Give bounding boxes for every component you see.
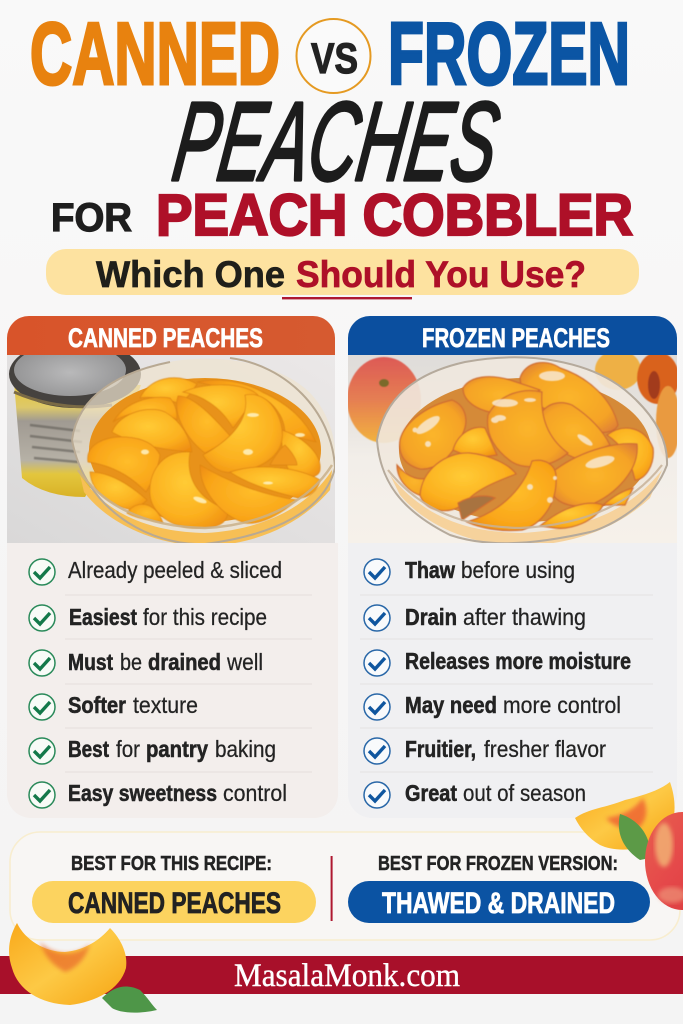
glass bowl — [377, 357, 667, 546]
item: best for pantry: pantry — [146, 736, 208, 762]
item: may need — [364, 692, 621, 720]
footer band: MasalaMonk.com — [234, 958, 460, 994]
photo: canned peaches — [7, 340, 335, 546]
heading: for: FOR — [51, 196, 132, 240]
item: fruitier: Fruitier, — [405, 736, 476, 762]
label: best for frozen version: BEST FOR FROZEN VERSION: — [378, 853, 618, 875]
pill: thawed and drained — [348, 881, 650, 923]
panel: canned list background — [7, 543, 338, 818]
item: sweetness — [29, 780, 287, 808]
photo: frozen peaches — [347, 350, 680, 546]
heading: canned: CANNED — [30, 4, 280, 103]
frost flecks — [412, 371, 616, 503]
item: easiest: for this recipe — [143, 604, 267, 630]
can — [9, 340, 141, 497]
header: canned peaches: CANNED PEACHES — [68, 323, 263, 353]
pill: canned peaches — [32, 881, 316, 923]
item: drain: after thawing — [463, 604, 586, 630]
panel: frozen list background — [348, 543, 677, 818]
title — [30, 4, 633, 248]
item: sweetness: Easy sweetness — [68, 780, 217, 806]
subtitle pill: Should You Use? — [296, 254, 586, 295]
item: fruitier — [364, 736, 606, 764]
item: softer: texture — [133, 692, 198, 718]
peach slice and leaf: top right — [575, 782, 675, 860]
item: best for pantry: for — [116, 736, 140, 762]
highlights — [141, 413, 305, 505]
pill: thawed and drained: THAWED & DRAINED — [382, 887, 615, 920]
item: best for pantry: Best — [68, 736, 109, 762]
item: releases — [364, 648, 631, 676]
pill: canned peaches: CANNED PEACHES — [68, 887, 281, 920]
canned list — [29, 557, 312, 808]
item: great: out of season — [463, 780, 586, 806]
peach slices — [88, 378, 320, 528]
divider — [331, 856, 333, 921]
item: sweetness: control — [223, 780, 287, 806]
badge: vs — [296, 19, 370, 93]
item: must be drained — [29, 649, 263, 676]
item: great: Great — [405, 780, 457, 806]
item: softer: Softer — [68, 692, 126, 718]
subtitle pill: Which One — [96, 254, 285, 295]
header: canned peaches — [7, 316, 335, 355]
item: may need: more control — [503, 692, 621, 718]
peach wedge and leaf: bottom left — [9, 923, 157, 1013]
header: frozen peaches — [348, 316, 677, 355]
heading: peach cobbler: PEACH COBBLER — [156, 183, 633, 248]
footer band — [0, 956, 683, 994]
item: drain: Drain — [405, 604, 457, 630]
panel: verdict — [10, 832, 680, 940]
item: drain — [364, 604, 586, 631]
frozen list — [360, 557, 653, 808]
header: frozen peaches: FROZEN PEACHES — [422, 323, 610, 353]
item: easiest — [29, 604, 267, 631]
item: thaw: before using — [461, 557, 575, 583]
item: best for pantry — [29, 736, 276, 764]
item: thaw — [364, 557, 575, 585]
item: releases: Releases more moisture — [405, 648, 631, 674]
item: already peeled: Already peeled & sliced — [68, 557, 282, 583]
whole peaches background — [347, 350, 680, 458]
item: thaw: Thaw — [405, 557, 455, 583]
whole peach: right edge — [645, 812, 683, 910]
item: softer — [29, 692, 198, 720]
glass bowl — [72, 358, 335, 546]
badge: vs: VS — [311, 35, 358, 83]
item: fruitier: fresher flavor — [484, 736, 606, 762]
item: great — [364, 780, 586, 808]
bowl front rim — [78, 465, 332, 528]
item: may need: May need — [405, 692, 497, 718]
bowl front rim — [388, 465, 662, 528]
item: must be drained: Must — [68, 649, 113, 675]
frosted peach slices — [397, 363, 653, 531]
item: must be drained: be — [120, 649, 142, 675]
item: easiest: Easiest — [69, 604, 137, 630]
item: must be drained: drained — [148, 649, 221, 675]
item: best for pantry: baking — [215, 736, 276, 762]
item: must be drained: well — [226, 649, 263, 675]
label: best for this recipe: BEST FOR THIS RECIPE: — [71, 853, 272, 875]
subtitle pill — [46, 249, 639, 299]
